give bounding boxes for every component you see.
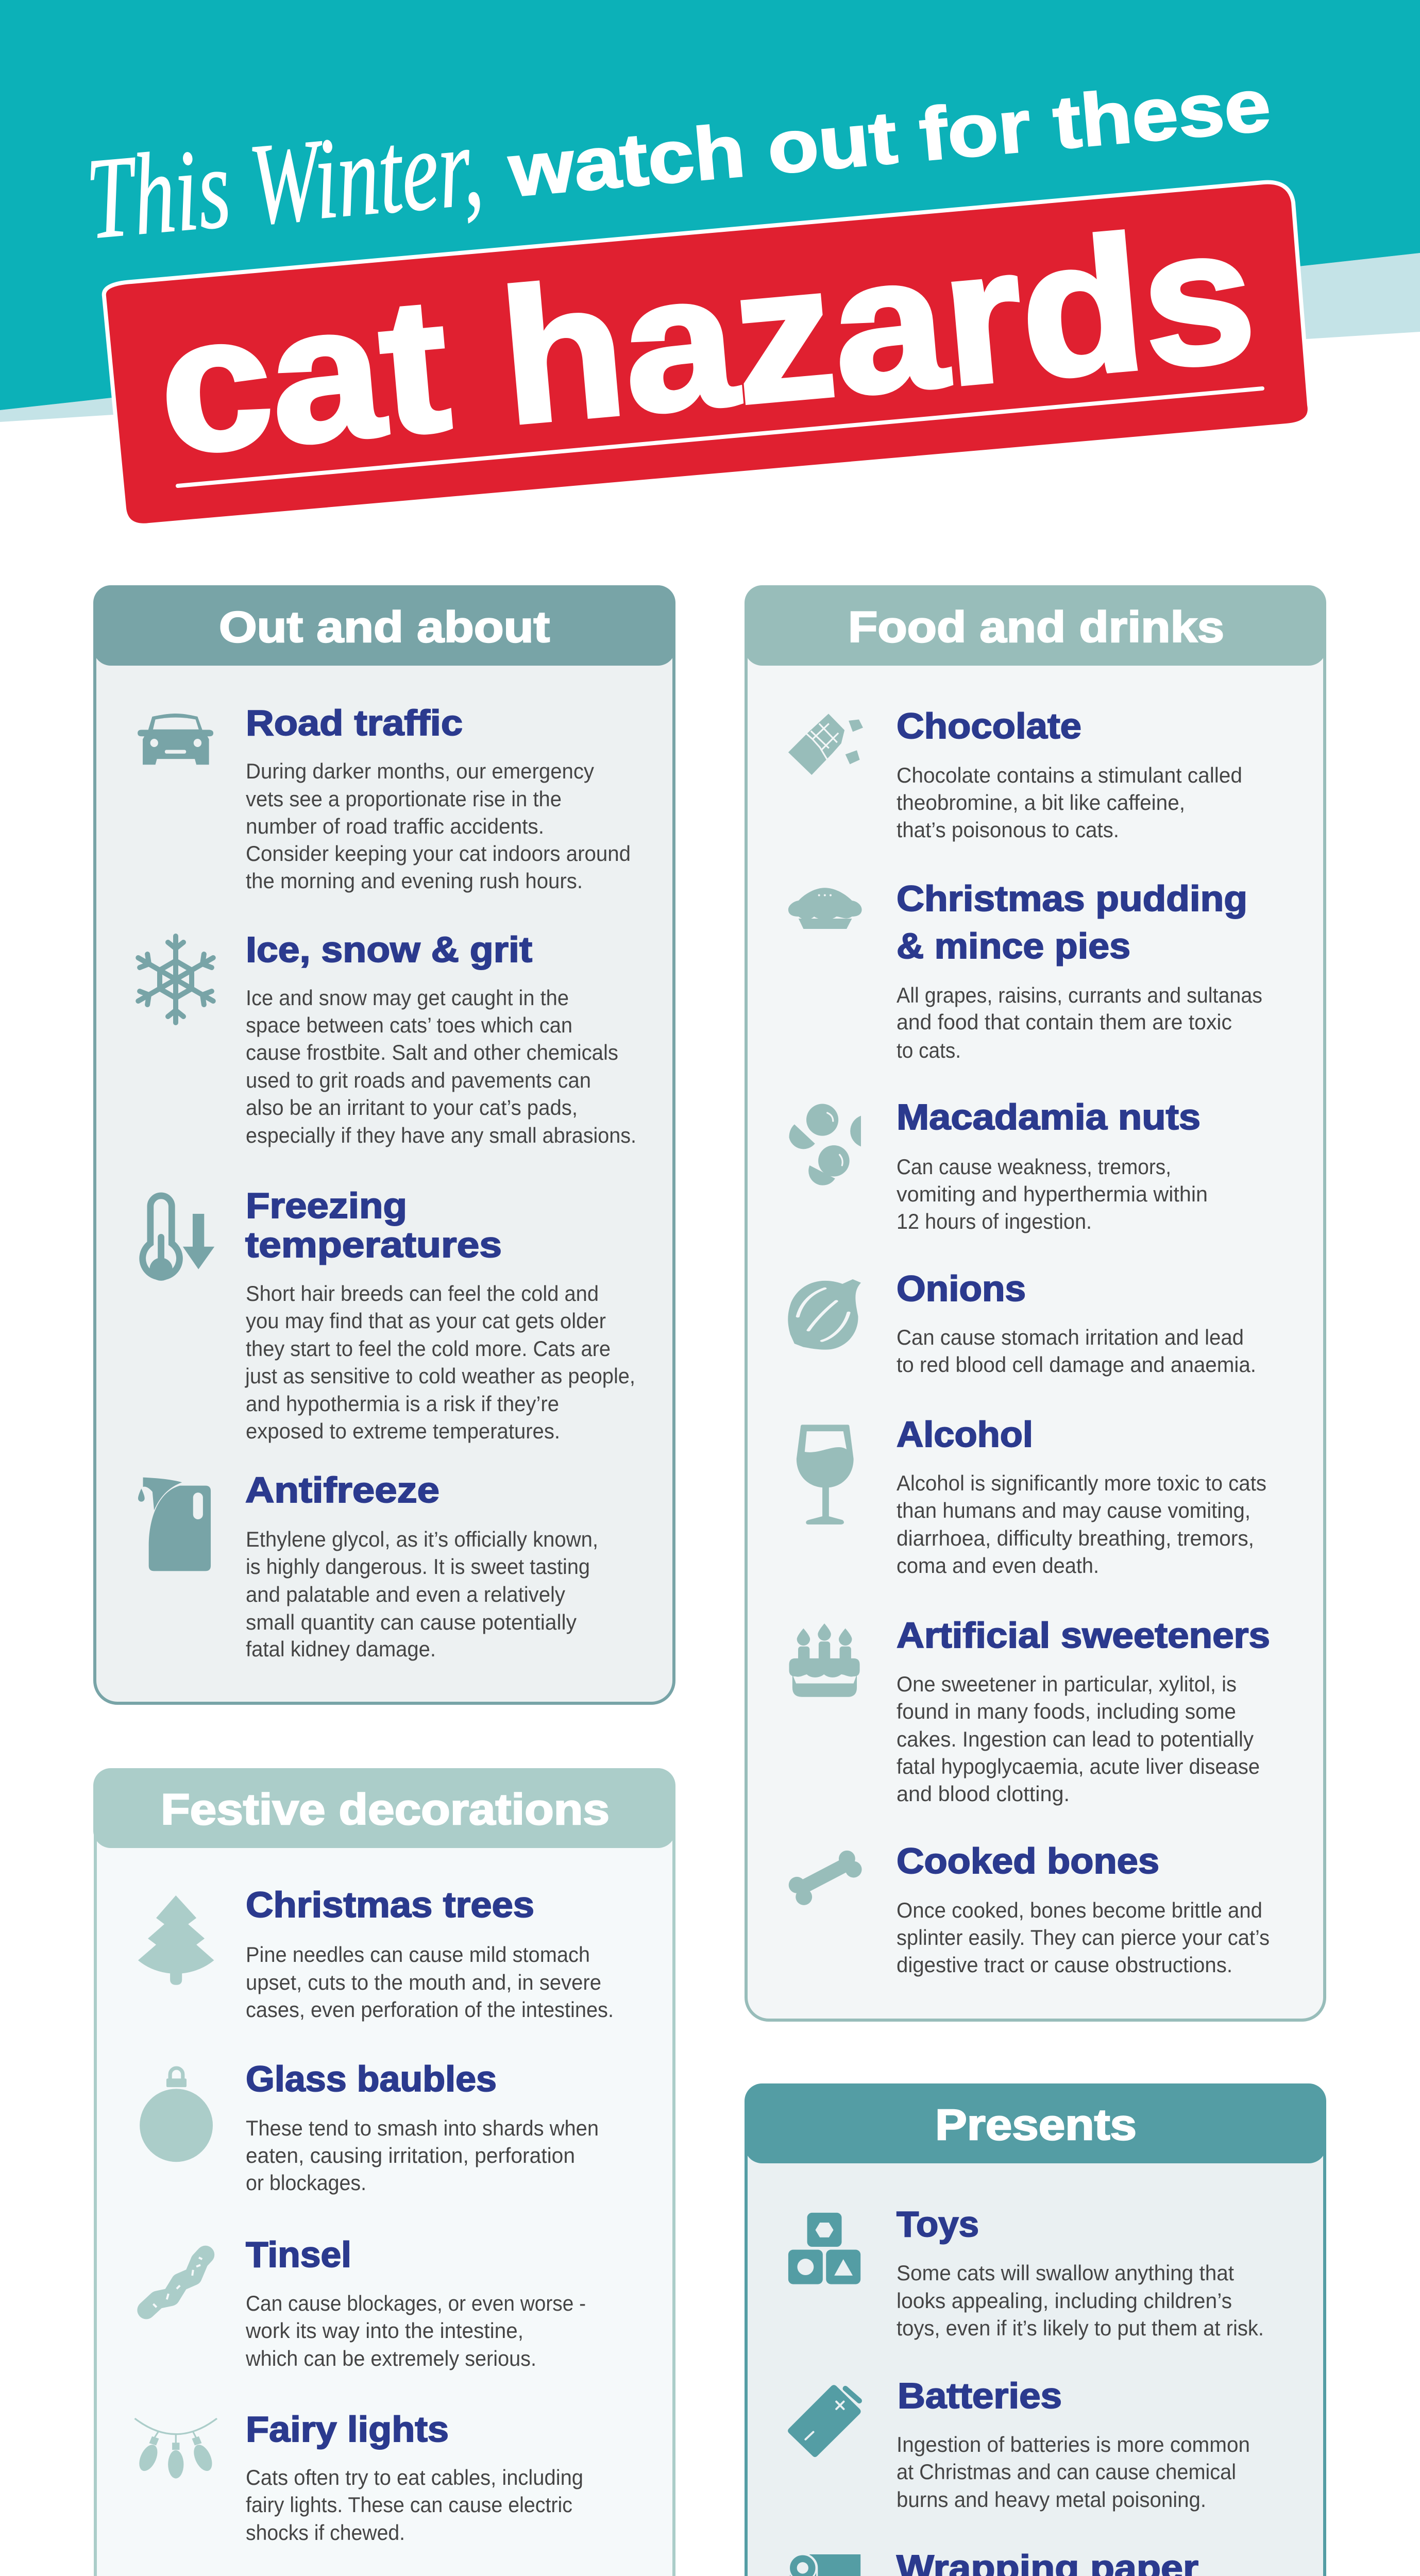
description: used to grit roads and pavements can (246, 1068, 591, 1092)
hazard: wrapping paper (789, 2548, 1208, 2576)
description: Can cause stomach irritation and lead (897, 1325, 1244, 1349)
description: Consider keeping your cat indoors around (246, 841, 631, 866)
description: you may find that as your cat gets older (246, 1309, 606, 1333)
description: Ingestion of batteries is more common (897, 2432, 1250, 2456)
description: found in many foods, including some (897, 1699, 1236, 1723)
heading: Onions (897, 1268, 1026, 1309)
icon: bone (789, 1851, 862, 1905)
description: Short hair breeds can feel the cold and (246, 1281, 599, 1306)
heading: Macadamia nuts (897, 1097, 1201, 1137)
panel: Food and drinks (745, 585, 1326, 2020)
description: work its way into the intestine, (245, 2318, 523, 2343)
description (897, 1672, 1260, 1806)
description: the morning and evening rush hours. (246, 869, 583, 893)
icon: tinsel (146, 2255, 206, 2310)
description: 12 hours of ingestion. (897, 1209, 1092, 1233)
heading (897, 878, 1247, 966)
panel header: Festive decorations: Festive decorations (161, 1785, 610, 1834)
description: to red blood cell damage and anaemia. (897, 1352, 1256, 1377)
heading: Freezing (246, 1185, 407, 1226)
heading: Cooked bones (897, 1841, 1159, 1881)
heading: Alcohol (897, 1414, 1033, 1454)
description: Pine needles can cause mild stomach (246, 1942, 590, 1967)
description: splinter easily. They can pierce your cat’s (897, 1925, 1270, 1950)
description: that’s poisonous to cats. (897, 818, 1119, 842)
description (897, 983, 1262, 1062)
description: shocks if chewed. (246, 2520, 405, 2545)
description (897, 1471, 1266, 1578)
panel header: Presents (745, 2083, 1326, 2163)
description: looks appealing, including children’s (897, 2289, 1232, 2313)
icon: macadamia nuts (789, 1104, 861, 1185)
description: at Christmas and can cause chemical (897, 2460, 1236, 2484)
description (897, 1155, 1208, 1233)
heading: Chocolate (897, 706, 1081, 746)
heading: Batteries (898, 2376, 1062, 2416)
icon: toy blocks (788, 2213, 860, 2284)
description: toys, even if it’s likely to put them at risk. (897, 2316, 1264, 2340)
icon: antifreeze bottle (138, 1478, 211, 1571)
description: especially if they have any small abrasions. (246, 1123, 636, 1147)
description (244, 1281, 635, 1443)
hazard: alcohol (797, 1414, 1266, 1578)
heading: Toys (897, 2204, 979, 2244)
description: eaten, causing irritation, perforation (246, 2143, 575, 2167)
hazard: cooked bones (789, 1841, 1270, 1977)
icon: chocolate bar (788, 714, 863, 775)
title: This Winter, watch out for these: This Winter, (81, 100, 487, 263)
description: cases, even perforation of the intestines. (246, 1997, 614, 2022)
panel: Out and about (93, 585, 675, 1703)
description: cause frostbite. Salt and other chemicals (246, 1040, 618, 1064)
icon: wine glass (797, 1425, 854, 1524)
description (897, 2432, 1250, 2512)
description: or blockages. (246, 2171, 366, 2195)
hazard: freezing temperatures (143, 1185, 635, 1443)
hazard: chocolate (788, 706, 1242, 842)
icon: onion (788, 1279, 861, 1350)
hazard: Christmas trees (138, 1885, 614, 2022)
description: digestive tract or cause obstructions. (897, 1953, 1232, 1977)
description (897, 763, 1242, 842)
description: Alcohol is significantly more toxic to cats (897, 1471, 1266, 1495)
icon: Christmas tree (138, 1895, 214, 1985)
heading: Road traffic (246, 703, 463, 743)
title banner: cat hazards: cat hazards (151, 187, 1262, 494)
description: Can cause blockages, or even worse - (246, 2291, 586, 2315)
description (897, 1898, 1270, 1977)
description: upset, cuts to the mouth and, in severe (246, 1970, 601, 1994)
description: small quantity can cause potentially (246, 1610, 577, 1634)
description: fatal hypoglycaemia, acute liver disease (897, 1754, 1260, 1778)
icon: fairy lights (135, 2418, 217, 2479)
description (246, 1527, 598, 1661)
description: coma and even death. (897, 1553, 1099, 1578)
hazard: road traffic (138, 703, 631, 893)
heading: Glass baubles (246, 2059, 497, 2099)
description (897, 2261, 1264, 2340)
description (246, 2116, 599, 2195)
hazard: fairy lights (135, 2409, 583, 2545)
icon: cake (789, 1623, 860, 1697)
hazard: tinsel (146, 2234, 586, 2370)
heading (245, 1185, 502, 1265)
heading: Fairy lights (246, 2409, 449, 2449)
panel header: Food and drinks: Food and drinks (848, 603, 1224, 651)
description (246, 2465, 583, 2545)
icon: snowflake (134, 936, 217, 1023)
description (246, 759, 631, 893)
icon: car (138, 714, 213, 765)
description: just as sensitive to cold weather as people, (244, 1364, 635, 1388)
description: is highly dangerous. It is sweet tasting (246, 1554, 590, 1579)
description (246, 986, 636, 1147)
description: number of road traffic accidents. (246, 814, 544, 838)
heading: & mince pies (897, 926, 1130, 966)
description: also be an irritant to your cat’s pads, (246, 1095, 578, 1120)
icon: battery (788, 2385, 861, 2457)
heading: temperatures (245, 1225, 502, 1265)
description: During darker months, our emergency (246, 759, 594, 783)
description: burns and heavy metal poisoning. (897, 2487, 1206, 2512)
description: diarrhoea, difficulty breathing, tremors, (897, 1526, 1254, 1550)
description: fatal kidney damage. (246, 1637, 436, 1661)
description: vomiting and hyperthermia within (897, 1182, 1208, 1206)
hazard: Christmas pudding and mince pies (788, 878, 1262, 1062)
description: and blood clotting. (897, 1782, 1070, 1806)
panel: Festive decorations (93, 1768, 675, 2576)
description: These tend to smash into shards when (246, 2116, 599, 2140)
description: Once cooked, bones become brittle and (897, 1898, 1262, 1922)
description: space between cats’ toes which can (246, 1013, 572, 1037)
heading: Ice, snow & grit (246, 929, 532, 970)
description: Ethylene glycol, as it’s officially known, (246, 1527, 598, 1551)
icon: pie (788, 888, 862, 929)
hazard: toys (788, 2204, 1264, 2340)
description: All grapes, raisins, currants and sultanas (897, 983, 1262, 1007)
description (246, 1942, 614, 2022)
description: which can be extremely serious. (245, 2346, 536, 2370)
hazard: glass baubles (140, 2059, 599, 2195)
description: and palatable and even a relatively (246, 1582, 565, 1606)
description: and food that contain them are toxic (897, 1010, 1232, 1034)
description: One sweetener in particular, xylitol, is (897, 1672, 1237, 1696)
description: Some cats will swallow anything that (897, 2261, 1234, 2285)
description: fairy lights. These can cause electric (246, 2493, 572, 2517)
hazard: onions (788, 1268, 1256, 1377)
panel header: Presents: Presents (935, 2100, 1137, 2149)
heading: Christmas pudding (897, 878, 1247, 919)
description (245, 2291, 586, 2370)
heading: Artificial sweeteners (897, 1615, 1270, 1655)
description: exposed to extreme temperatures. (246, 1419, 560, 1443)
description: Ice and snow may get caught in the (246, 986, 569, 1010)
description (897, 1325, 1256, 1377)
panel header: Food and drinks (745, 585, 1326, 666)
title: This Winter, watch out for these (81, 63, 1274, 263)
heading: Christmas trees (246, 1885, 534, 1925)
hazard: antifreeze (138, 1470, 598, 1661)
description: cakes. Ingestion can lead to potentially (897, 1727, 1254, 1751)
hazard: macadamia nuts (789, 1097, 1208, 1233)
panel: Presents (745, 2083, 1326, 2576)
title: This Winter, watch out for these: watch out for these (505, 63, 1274, 212)
hazard: ice, snow and grit (134, 929, 636, 1147)
icon: thermometer with arrow (143, 1196, 214, 1281)
heading: Tinsel (246, 2234, 351, 2275)
hazard: artificial sweeteners (789, 1615, 1270, 1806)
description: they start to feel the cold more. Cats are (246, 1336, 611, 1361)
description: theobromine, a bit like caffeine, (897, 790, 1185, 815)
description: vets see a proportionate rise in the (246, 787, 562, 811)
icon: bauble (140, 2068, 213, 2162)
heading: Antifreeze (245, 1470, 439, 1510)
description: to cats. (897, 1038, 961, 1062)
description: than humans and may cause vomiting, (897, 1498, 1250, 1522)
panel header: Out and about: Out and about (219, 603, 550, 651)
panel header: Festive decorations (93, 1768, 675, 1848)
description: and hypothermia is a risk if they’re (246, 1392, 559, 1416)
description: Can cause weakness, tremors, (897, 1155, 1171, 1179)
icon: wrapping paper roll (789, 2554, 860, 2576)
description: Cats often try to eat cables, including (246, 2465, 583, 2489)
panel header: Out and about (93, 585, 675, 666)
hazard: batteries (788, 2376, 1250, 2512)
description: Chocolate contains a stimulant called (897, 763, 1242, 787)
header band: teal background (0, 0, 1420, 422)
